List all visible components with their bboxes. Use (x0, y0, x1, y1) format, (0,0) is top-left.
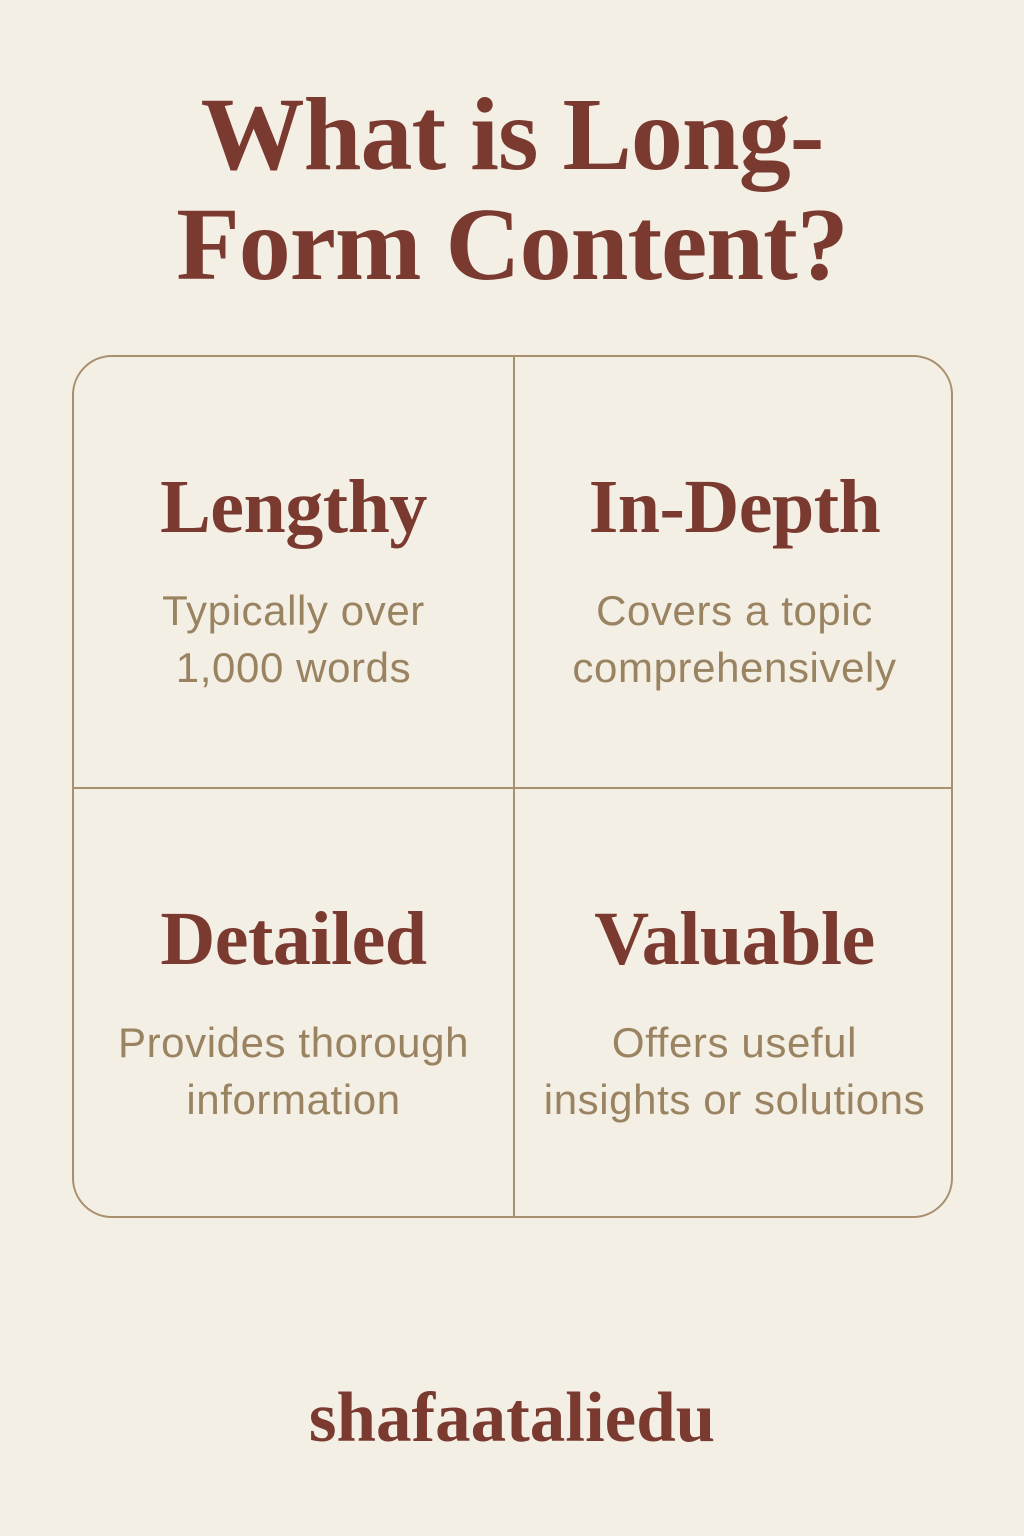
title: Form Content? (176, 187, 848, 302)
text: valuable description: Offers useful (612, 1019, 857, 1066)
text: lengthy description (162, 587, 425, 691)
title (176, 77, 848, 302)
heading: lengthy: Lengthy (160, 465, 427, 549)
text: lengthy description: 1,000 words (176, 644, 411, 691)
text: lengthy description: Typically over (162, 587, 425, 634)
panel: four-quadrant grid (72, 355, 953, 1218)
heading: valuable: Valuable (594, 897, 875, 981)
text: detailed description: Provides thorough (118, 1019, 469, 1066)
heading: detailed: Detailed (160, 897, 427, 981)
panel: lengthy (160, 465, 427, 691)
heading: in-depth: In-Depth (589, 465, 880, 549)
text: valuable description: insights or solutions (544, 1076, 925, 1123)
footer brand: shafaataliedu (309, 1379, 715, 1457)
text: in-depth description (572, 587, 897, 691)
title: What is Long- (201, 77, 823, 192)
panel: in-depth (572, 465, 897, 691)
text: detailed description: information (186, 1076, 401, 1123)
text: detailed description (118, 1019, 469, 1123)
text: in-depth description: comprehensively (572, 644, 897, 691)
text: valuable description (544, 1019, 925, 1123)
panel: valuable (544, 897, 925, 1123)
text: in-depth description: Covers a topic (596, 587, 873, 634)
panel: detailed (118, 897, 469, 1123)
